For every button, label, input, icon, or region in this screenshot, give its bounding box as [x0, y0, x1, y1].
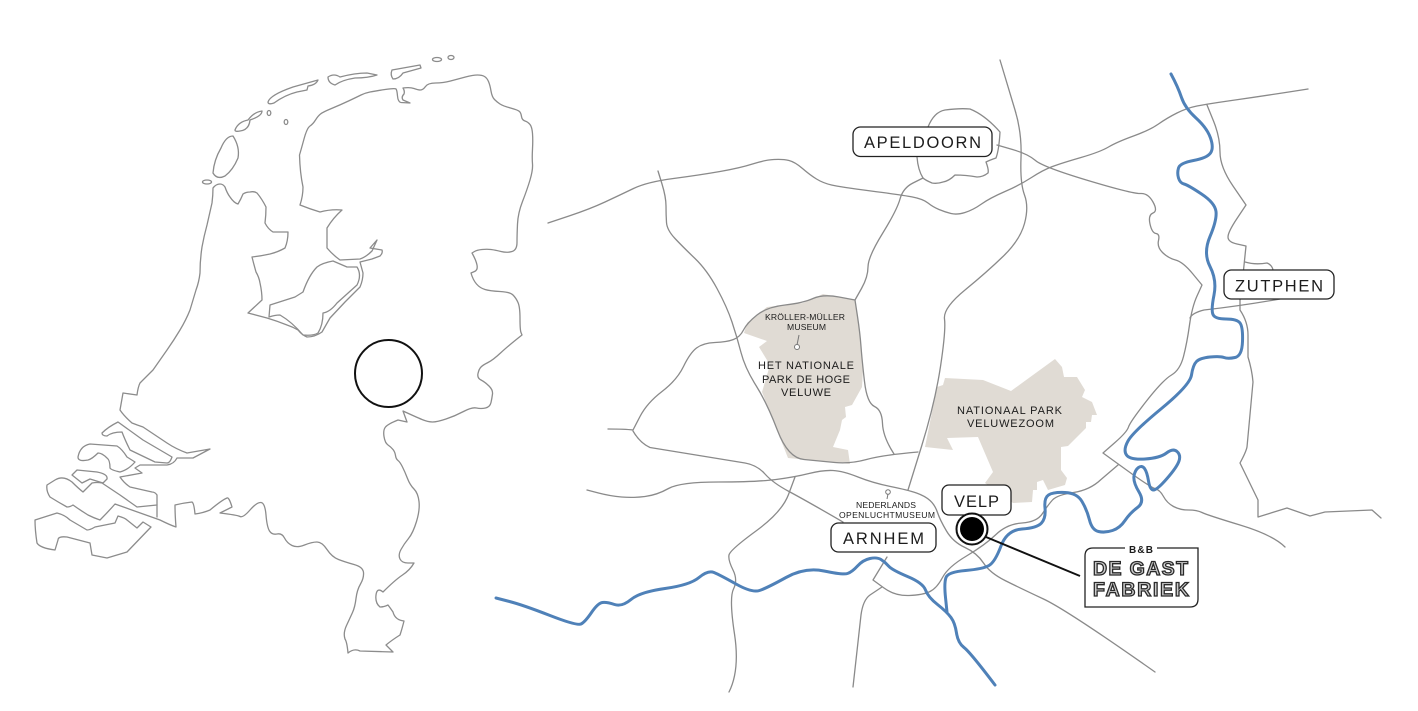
logo: B&B De Gast Fabriek: B&B — [1129, 545, 1153, 556]
label: Nationaal Park Veluwezoom — [957, 405, 1063, 430]
city label: Arnhem: ARNHEM — [843, 530, 924, 548]
river: IJssel — [945, 74, 1243, 612]
islands: Wadden — [202, 56, 454, 184]
label: Kröller-Müller Museum: MUSEUM — [787, 322, 826, 332]
label: Nationaal Park Veluwezoom: VELUWEZOOM — [967, 418, 1054, 430]
logo: B&B De Gast Fabriek: DE GAST — [1093, 558, 1188, 580]
city label: Zutphen — [1224, 270, 1334, 299]
marker: De Gast Fabriek location — [956, 514, 988, 544]
label: Het Nationale Park De Hoge Veluwe: VELUWE — [781, 387, 831, 399]
park: Veluwezoom area — [925, 359, 1097, 503]
islands: Zeeland and Zuid-Holland — [35, 422, 172, 558]
label: Nederlands Openluchtmuseum: OPENLUCHTMUSEUM — [839, 510, 935, 520]
Zeeland spur — [156, 505, 158, 517]
mainland coast and borders — [47, 75, 533, 653]
label: Kröller-Müller Museum: KRÖLLER-MÜLLER — [765, 312, 845, 322]
city label: Apeldoorn — [853, 127, 992, 156]
city label: Arnhem — [831, 523, 936, 552]
label: Het Nationale Park De Hoge Veluwe — [758, 360, 854, 399]
city label: Apeldoorn: APELDOORN — [864, 134, 981, 152]
label: Nationaal Park Veluwezoom: NATIONAAL PARK — [957, 405, 1063, 417]
logo: B&B De Gast Fabriek: FABRIEK — [1093, 579, 1189, 601]
Flevoland polder — [269, 261, 360, 335]
city label: Zutphen: ZUTPHEN — [1235, 278, 1323, 296]
label: Kröller-Müller Museum — [765, 312, 845, 350]
city label: Velp — [942, 485, 1011, 515]
label: Het Nationale Park De Hoge Veluwe: HET NATIONALE — [758, 360, 854, 372]
leader line to B&B — [986, 537, 1080, 576]
label: Nederlands Openluchtmuseum — [839, 490, 935, 520]
marker: Gelderland region circle — [355, 340, 422, 407]
river: Rijn — [496, 558, 995, 685]
label: Het Nationale Park De Hoge Veluwe: PARK DE HOGE — [762, 374, 850, 386]
map: region around Velp — [496, 60, 1381, 692]
map: the Netherlands outline — [35, 56, 533, 653]
label: Nederlands Openluchtmuseum: NEDERLANDS — [856, 500, 916, 510]
park: Hoge Veluwe area — [744, 294, 863, 464]
roads — [548, 60, 1381, 692]
logo: B&B De Gast Fabriek — [1085, 545, 1198, 607]
city label: Velp: VELP — [954, 493, 999, 511]
